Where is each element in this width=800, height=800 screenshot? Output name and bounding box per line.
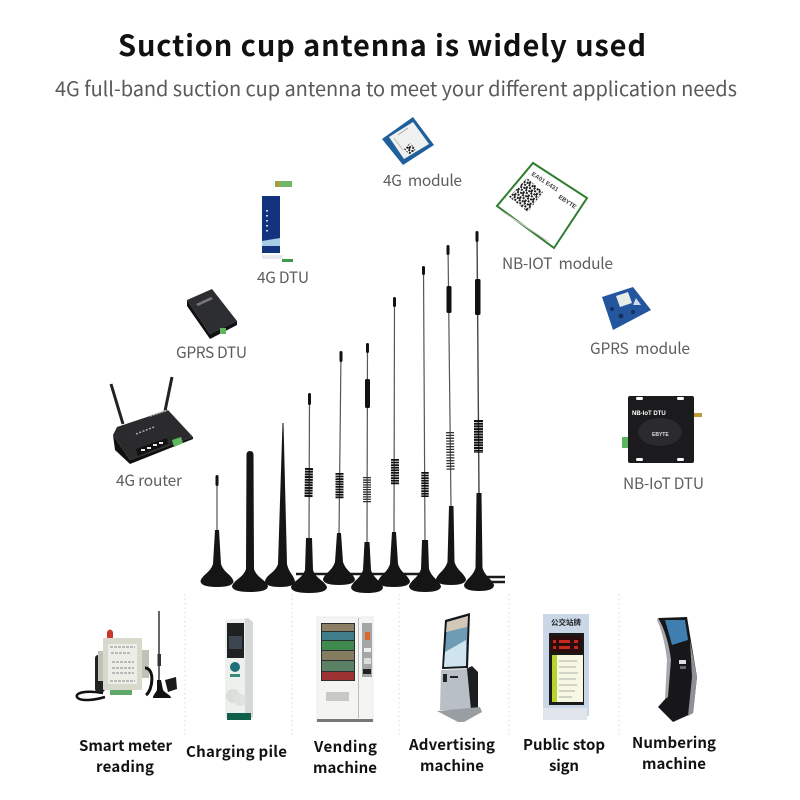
label: Vending machine: machine (313, 757, 377, 778)
antenna 1 (200, 475, 234, 587)
label: Charging pile: Charging pile (186, 741, 287, 762)
label: Advertising machine: machine (420, 755, 484, 776)
label: Numbering machine (632, 732, 716, 774)
antenna 8 (409, 266, 441, 592)
device: numbering machine (657, 617, 697, 722)
subtitle: 4G full-band suction cup antenna to meet your different application needs (55, 73, 737, 102)
label: 4G DTU: 4G DTU (257, 266, 309, 288)
device: 4G DTU (262, 181, 293, 262)
label: Vending machine: Vending (313, 736, 377, 757)
antenna 4 (291, 393, 327, 593)
antenna group (200, 231, 505, 593)
label: Numbering machine: machine (642, 753, 706, 774)
device: NB-IoT DTU: EBYTE (652, 432, 669, 438)
label: NB-IOT module: NB-IOT module (502, 252, 613, 274)
cable behind bases (296, 574, 505, 582)
label: Public stop sign (523, 734, 605, 776)
title: Suction cup antenna is widely used (118, 23, 646, 65)
device: charging pile (225, 618, 253, 720)
label: Advertising machine (408, 734, 495, 776)
label: GPRS DTU: GPRS DTU (176, 341, 247, 363)
label: Advertising machine: Advertising (408, 734, 495, 755)
antenna 2 (232, 451, 268, 592)
antenna 7 (378, 297, 410, 587)
label: 4G module: 4G module (383, 169, 462, 191)
label: Public stop sign: Public stop (523, 734, 605, 755)
antenna 3 (265, 423, 295, 587)
label: 4G router: 4G router (116, 469, 183, 491)
device: NB-IoT DTU (622, 396, 702, 463)
antenna 10 (464, 231, 494, 591)
label: NB-IoT DTU: NB-IoT DTU (623, 472, 704, 494)
device: public stop sign (543, 614, 589, 720)
label: Smart meter reading: reading (96, 756, 154, 777)
device: NB-IoT DTU: NB-IoT DTU (632, 411, 666, 417)
device: smart meter reader (77, 611, 177, 700)
device: GPRS module (602, 287, 651, 330)
device: NB-IOT module (497, 163, 587, 248)
label: Public stop sign: sign (549, 755, 579, 776)
antenna 9 (436, 245, 466, 585)
device: 4G router (111, 377, 193, 464)
device: NB-IOT module: EBYTE (557, 195, 577, 211)
label: Smart meter reading: Smart meter (79, 735, 172, 756)
device: advertising machine (437, 613, 482, 722)
label: Vending machine (313, 736, 377, 778)
device: vending machine (317, 617, 373, 722)
device: 4G module (382, 117, 434, 165)
label: Smart meter reading (79, 735, 172, 777)
label: Numbering machine: Numbering (632, 732, 716, 753)
antenna 5 (323, 351, 355, 585)
device: GPRS DTU (187, 289, 237, 339)
device: NB-IOT module: EA01 E431 (530, 172, 559, 194)
dotted column dividers (185, 594, 619, 735)
antenna 6 (351, 343, 383, 593)
label: GPRS module: GPRS module (590, 337, 690, 359)
device: public stop sign: 公交站牌 (551, 617, 581, 628)
